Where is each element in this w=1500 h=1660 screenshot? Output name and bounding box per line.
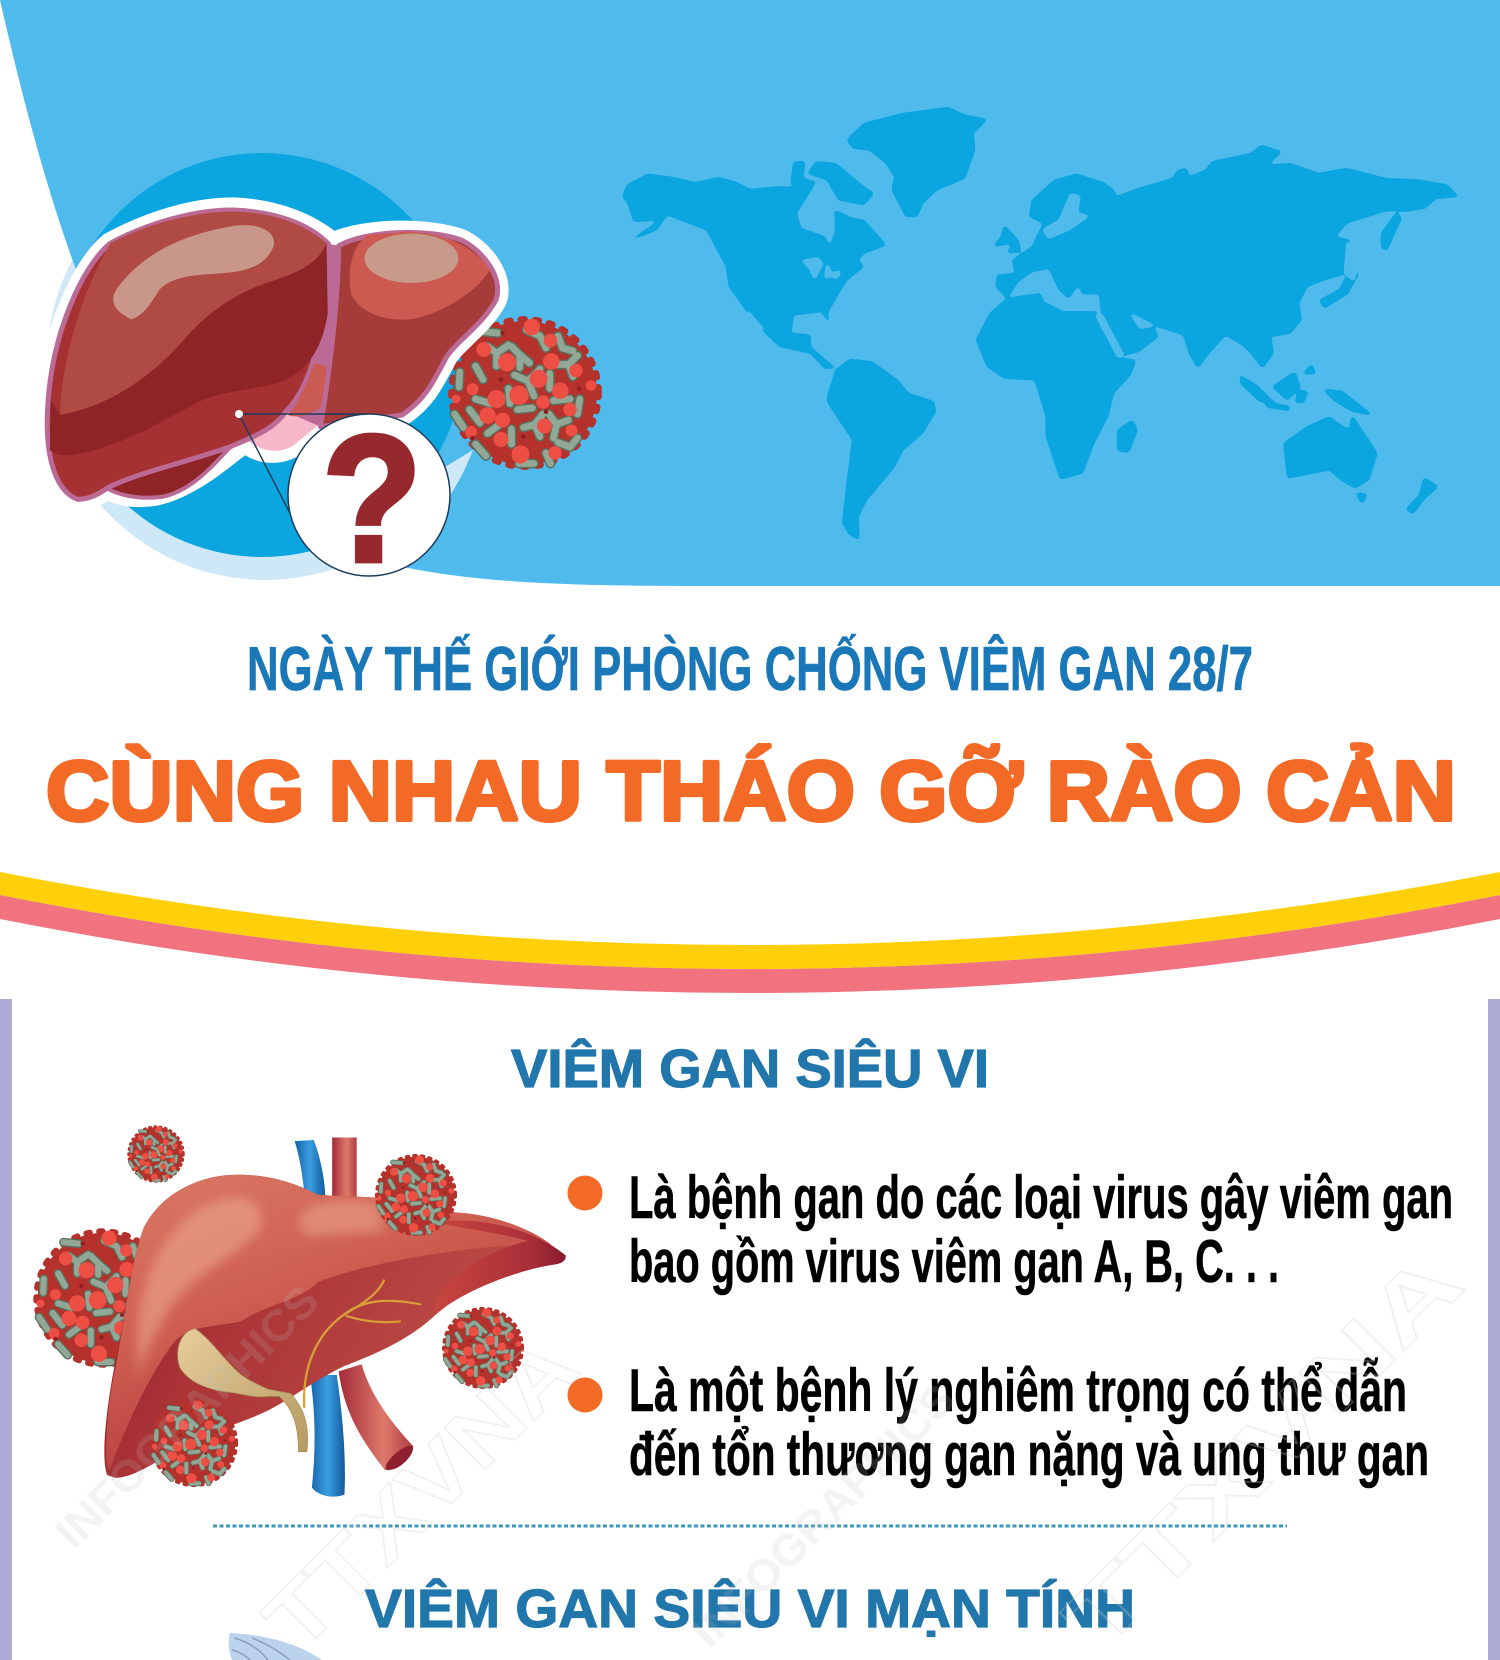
- side bars: [0, 999, 1500, 1660]
- right tip shading: [432, 1220, 566, 1314]
- bullet 1 text: [629, 1164, 1453, 1295]
- watermark: TTXVNA: [246, 1318, 596, 1660]
- bullet 2 text: [629, 1357, 1429, 1488]
- liver left lobe: [47, 210, 329, 499]
- gallbladder pink: [249, 408, 320, 451]
- gallbladder: [178, 1329, 308, 1452]
- background: blue sky panel: [0, 0, 1500, 586]
- dotted divider: [213, 1524, 1287, 1528]
- watermark: INFOGRAPHICS: [682, 1375, 965, 1657]
- liver lower lobe: [107, 447, 231, 498]
- callout: question mark magnifier: ?: [322, 398, 422, 600]
- lower liver illustration: [104, 1137, 566, 1497]
- heading: viral hepatitis: VIÊM GAN SIÊU VI: [511, 1038, 989, 1099]
- left lobe highlight: [113, 225, 274, 319]
- central fissure strip: [286, 244, 339, 427]
- watermark: TTXVNA: [1046, 1234, 1481, 1660]
- bullet 2: [568, 1378, 602, 1412]
- organ illustration cropped at bottom: [229, 1633, 322, 1660]
- heading: chronic viral hepatitis: VIÊM GAN SIÊU VI MẠN TÍNH: [365, 1578, 1135, 1639]
- liver right lobe: [320, 232, 498, 427]
- highlight on lobe: [137, 1198, 261, 1379]
- vessels behind liver: [295, 1140, 325, 1200]
- right lobe highlight: [364, 234, 458, 283]
- virus beside top liver: [452, 319, 598, 466]
- virus: on top of liver: [377, 1155, 455, 1234]
- virus: left large: [36, 1231, 170, 1365]
- background: light ring behind liver: [47, 144, 483, 580]
- background: ring crescent: [385, 450, 473, 552]
- right lobe light area: [350, 232, 490, 320]
- world map: [622, 107, 1459, 540]
- curved bands: [0, 872, 1500, 993]
- virus: upper left: [129, 1126, 183, 1181]
- watermark: [46, 1234, 1481, 1660]
- watermark: INFOGRAPHICS: [46, 1276, 329, 1558]
- background: dark blue circle: [60, 153, 464, 557]
- bullet 1: [568, 1176, 602, 1210]
- title: main slogan: CÙNG NHAU THÁO GỠ RÀO CẢN: [46, 744, 1456, 838]
- virus: right of liver: [444, 1308, 522, 1387]
- callout: question mark magnifier: [235, 398, 450, 600]
- liver body: [104, 1175, 566, 1478]
- salmon wedge: [288, 363, 328, 416]
- left lobe light area: [60, 212, 327, 415]
- left lobe dark band: [50, 243, 328, 455]
- liver upper lobe: [106, 1175, 551, 1471]
- bile ducts: [304, 1280, 420, 1407]
- top liver illustration: [46, 208, 498, 500]
- liver white outline: [46, 208, 498, 500]
- virus: lower on liver: [152, 1400, 236, 1485]
